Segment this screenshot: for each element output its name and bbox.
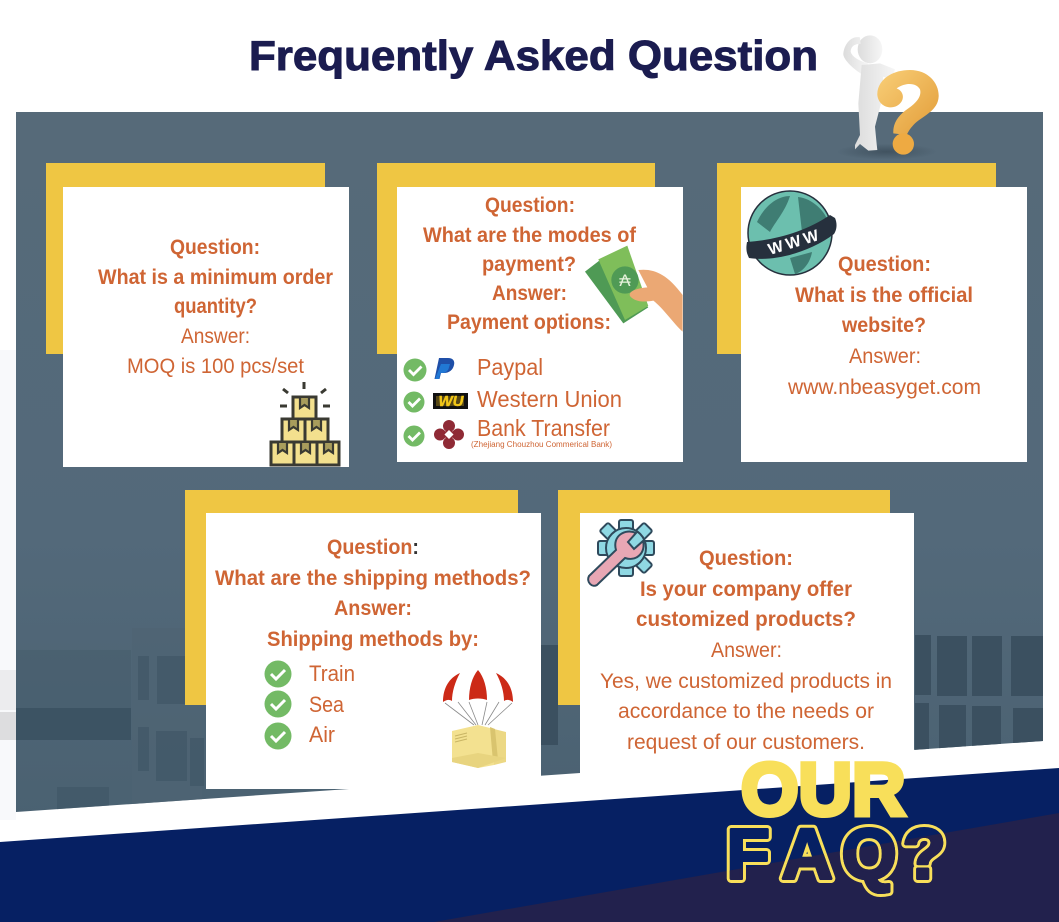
icon: paypal logo bbox=[434, 358, 454, 379]
panel: official website bbox=[717, 163, 1027, 462]
our: OUR bbox=[741, 748, 905, 831]
shipping item: air bbox=[264, 722, 335, 750]
panel: minimum order: MOQ is 100 pcs/set bbox=[127, 355, 304, 378]
panel: minimum order bbox=[46, 163, 349, 467]
bank transfer label: Bank Transfer bbox=[477, 415, 610, 441]
panel: shipping methods bbox=[185, 490, 541, 789]
panel: shipping methods: What are the shipping methods? bbox=[215, 567, 531, 590]
icon: thinking person with question mark bbox=[837, 35, 939, 160]
faq outline: FAQ? bbox=[726, 816, 946, 894]
panel: official website: What is the official bbox=[795, 284, 973, 307]
bank name note: (Zhejiang Chouzhou Commerical Bank) bbox=[471, 440, 612, 449]
footer band: dark slant bbox=[434, 813, 1059, 922]
faq outline: FAQ? bbox=[726, 816, 946, 894]
panel: payment modes bbox=[377, 163, 683, 462]
shipping item: sea: Sea bbox=[309, 692, 345, 717]
question text: Question: bbox=[485, 194, 575, 217]
icon: stacked boxes bbox=[271, 382, 339, 465]
panel: payment modes: What are the modes of bbox=[423, 224, 637, 247]
answer text: Answer: bbox=[181, 325, 250, 348]
icon: www globe: WWW bbox=[766, 227, 822, 259]
faq outline: FAQ? bbox=[726, 816, 946, 894]
panel: customized products bbox=[558, 490, 914, 800]
footer band: navy bbox=[0, 768, 1059, 922]
icon: parachute with box bbox=[443, 670, 513, 768]
answer text: Answer: bbox=[711, 639, 782, 662]
panel: customized products: customized products? bbox=[636, 608, 856, 631]
panel: official website: website? bbox=[841, 314, 926, 337]
panel: shipping methods: Shipping methods by: bbox=[267, 628, 479, 651]
panel: minimum order: What is a minimum order bbox=[98, 266, 333, 289]
answer text: Answer: bbox=[849, 345, 921, 368]
question text: Question: bbox=[327, 536, 419, 559]
icon: golden question mark bbox=[877, 70, 939, 155]
icon: gear and wrench bbox=[588, 520, 654, 586]
shipping item: air: Air bbox=[309, 722, 335, 747]
icon: person figure bbox=[843, 35, 895, 151]
icon: bank logo bbox=[434, 420, 464, 449]
shipping item: sea bbox=[264, 690, 345, 718]
panel: customized products: accordance to the needs or bbox=[618, 700, 874, 723]
question text: Question: bbox=[170, 236, 260, 259]
panel: official website: www.nbeasyget.com bbox=[787, 376, 981, 399]
western union label: Western Union bbox=[477, 386, 622, 412]
panel: customized products: request of our customers. bbox=[627, 731, 865, 754]
answer text: Answer: bbox=[334, 597, 412, 620]
check icon: bank transfer bbox=[404, 426, 424, 446]
check icon: paypal bbox=[404, 358, 426, 382]
icon: western union logo: WU bbox=[438, 393, 465, 410]
shipping item: train: Train bbox=[309, 661, 355, 686]
question text: Question: bbox=[699, 547, 793, 570]
left edge faded photo bbox=[0, 350, 16, 820]
panel: payment modes: Payment options: bbox=[447, 311, 611, 334]
panel: customized products: Is your company offer bbox=[640, 578, 852, 601]
panel: minimum order: quantity? bbox=[174, 295, 257, 318]
paypal label: Paypal bbox=[477, 354, 543, 380]
check icon: western union bbox=[404, 392, 424, 412]
background photo panel bbox=[16, 112, 1043, 822]
question text: Question: bbox=[838, 253, 931, 276]
shipping item: train bbox=[264, 660, 355, 688]
answer text: Answer: bbox=[492, 282, 567, 305]
icon: hand holding money bbox=[585, 246, 683, 332]
panel: customized products: Yes, we customized products in bbox=[600, 670, 892, 693]
title: Frequently Asked Question bbox=[249, 32, 818, 79]
icon: hand holding money: ₳ bbox=[619, 271, 631, 290]
label: our faq bbox=[726, 748, 946, 894]
panel: payment modes: payment? bbox=[482, 253, 576, 276]
icon: www globe bbox=[746, 191, 837, 275]
